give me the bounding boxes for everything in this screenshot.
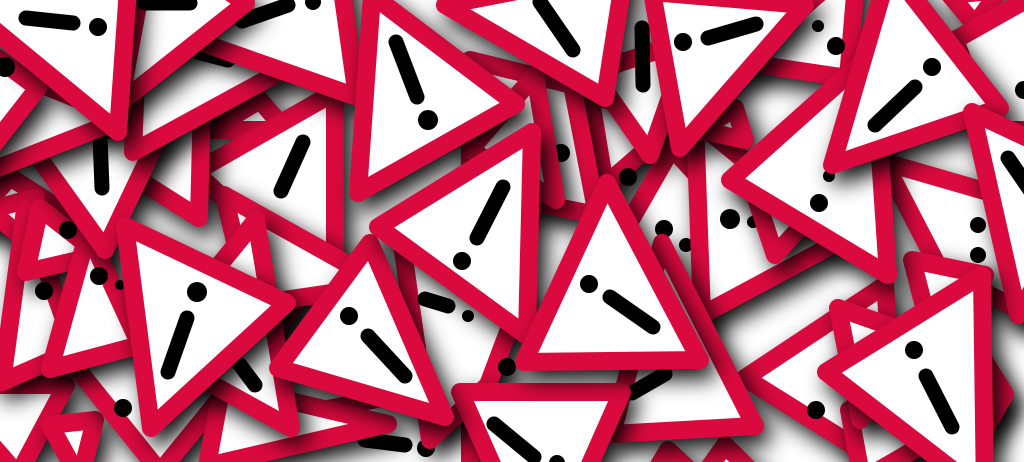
back layer triangle: lower right of centre [612,243,755,434]
back layer triangle: behind main centre [150,220,291,428]
back layer triangle: centre gap left stroke [470,75,556,200]
back layer triangle: bar bottom centre [225,380,470,462]
back layer triangle: shadowed corner [60,100,202,218]
back layer triangle: vertical bar top [592,28,690,155]
back layer triangle: far left second stroke [0,197,36,245]
warning sign: lower left centre [125,226,287,428]
warning sign: centre left [278,243,445,417]
back layer triangle: top right small strokes [950,0,1000,25]
back layer triangle: small V tip [750,180,825,255]
back layer triangle: lower left red fragment [50,420,95,462]
back layer triangle: two dots [619,148,720,340]
back layer triangle: bottom dot [70,300,300,462]
back layer triangle: right far [884,162,1024,320]
back layer triangle: far right fragment [985,362,1005,430]
back layer triangle: bar upper centre left [195,92,335,300]
back layer triangle: top left band [0,60,125,183]
back layer triangle: tall with dots [695,120,842,315]
back layer triangle: dark bar under centre [400,230,520,440]
back layer triangle: centre gap right strokes [590,95,680,185]
back layer triangle: dark fragment by top right [700,108,745,140]
back layer triangle: top left dot [0,30,38,175]
back layer triangle: bottom lower left [207,385,388,462]
back layer triangle: upper right dots [740,0,858,78]
warning sign: right edge [972,112,1024,315]
back layer triangle: bottom left [0,385,66,462]
back layer triangle: corner near centre left [224,195,385,305]
warning sign: top second [120,0,357,97]
back layer triangle: dark fragment behind top row [210,100,285,130]
back layer triangle: small left [26,208,100,272]
warning sign: right centre [730,52,888,275]
warning sign: top left large [0,0,130,132]
back layer triangle: second row [133,0,280,152]
back layer triangle: left middle sign [50,232,140,369]
back layer triangle: lower right stroke [849,400,1000,462]
warning sign: bottom right large [826,275,985,462]
back layer triangle: lower right [745,285,900,462]
back layer triangle: lower strips [650,450,700,462]
back layer triangle: centre gap dot [470,60,597,215]
back layer triangle: small by lower right [838,308,930,420]
warning sign: top centre [445,0,625,98]
back layer triangle: top strip [120,0,246,103]
warning sign: bottom centre [460,392,622,462]
warning sign: top centre left [358,0,516,193]
back layer triangle: lower strips right [700,445,760,462]
warning sign: apex-down left [19,130,162,250]
warning sign: top right of centre [652,0,805,148]
warning sign: centre [524,183,700,362]
warning sign: centre upper [378,132,532,336]
back layer triangle: top right corner [955,0,1024,130]
back layer triangle: far left strokes [0,177,72,222]
back layer triangle: right small corner [912,260,985,330]
back layer triangle: left column [2,210,75,382]
warning sign: top right [832,0,1000,165]
